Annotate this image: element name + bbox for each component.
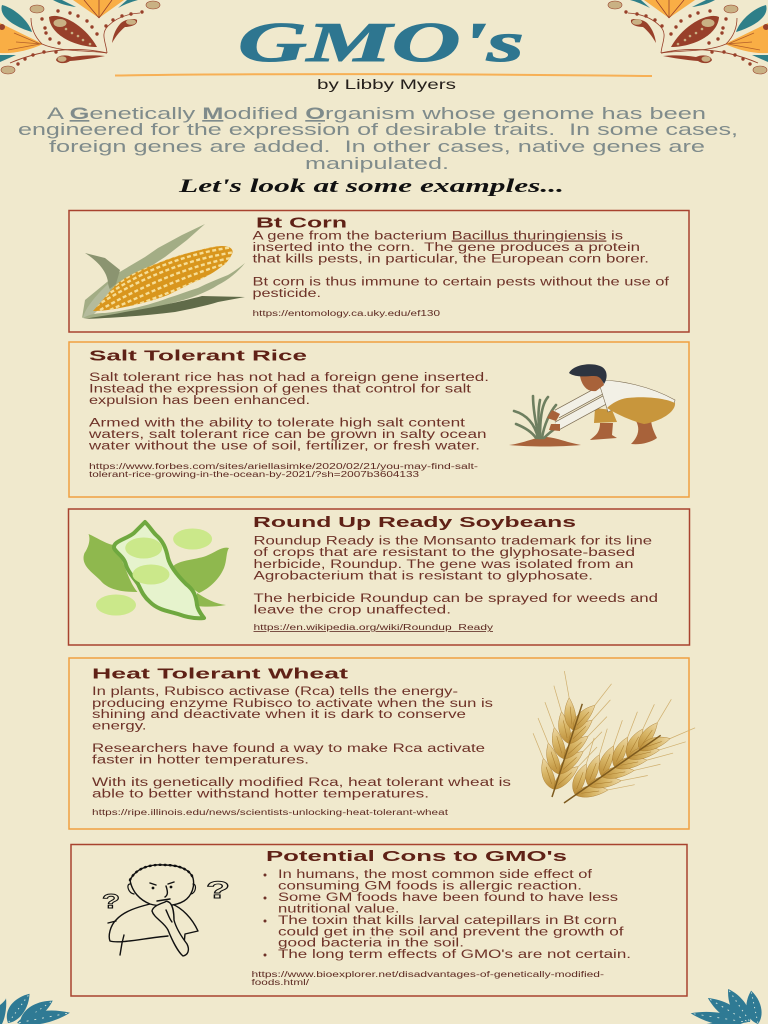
body text: In plants, Rubisco activase (Rca) tells the energy- <box>92 686 458 698</box>
bullet list: good bacteria in the soil. <box>278 938 464 950</box>
panel: Salt Tolerant Rice <box>69 342 689 497</box>
source link: tolerant-rice-growing-in-the-ocean-by-2021/?sh=2007b3604133 <box>89 470 420 479</box>
source link: https://ripe.illinois.edu/news/scientists-unlocking-heat-tolerant-wheat <box>92 808 449 817</box>
heading: Salt Tolerant Rice <box>89 348 307 364</box>
body text <box>252 230 670 300</box>
ornament: bottom right leaves <box>690 985 764 1024</box>
body text: Instead the expression of genes that control for salt <box>89 384 472 396</box>
source link <box>89 462 479 479</box>
body text: waters, salt tolerant rice can be grown in salty ocean <box>88 429 487 441</box>
source link: https://www.bioexplorer.net/disadvantages-of-genetically-modified- <box>252 970 604 979</box>
body text: water without the use of soil, fertilizer, or fresh water. <box>88 440 480 452</box>
body text: Agrobacterium that is resistant to glyphosate. <box>254 570 593 582</box>
body text: inserted into the corn. The gene produces a protein <box>252 242 640 254</box>
body text: A gene from the bacterium Bacillus thuringiensis is <box>252 230 623 242</box>
body text <box>254 536 658 616</box>
ornament: top right corner <box>608 0 768 74</box>
body text: of crops that are resistant to the glyphosate-based <box>254 547 635 559</box>
body text: pesticide. <box>252 288 321 300</box>
title underline <box>115 74 652 76</box>
panel: Round Up Ready Soybeans <box>68 509 690 645</box>
source link: foods.html/ <box>252 978 310 987</box>
icon: corn cob <box>82 224 245 319</box>
heading: Round Up Ready Soybeans <box>253 515 576 531</box>
bullet list: Some GM foods have been found to have less <box>278 892 618 904</box>
body text: herbicide, Roundup. The gene was isolated from an <box>254 559 634 571</box>
source link: https://www.forbes.com/sites/ariellasimke/2020/02/21/you-may-find-salt- <box>89 462 479 471</box>
body text: energy. <box>92 720 146 732</box>
body text: able to better withstand hotter temperatures. <box>92 788 429 800</box>
body text: With its genetically modified Rca, heat tolerant wheat is <box>92 777 511 789</box>
body text: Salt tolerant rice has not had a foreign gene inserted. <box>89 372 489 384</box>
heading: Bt Corn <box>256 216 347 232</box>
icon: thinking person <box>108 865 198 956</box>
source link: https://en.wikipedia.org/wiki/Roundup_Ready <box>254 623 493 632</box>
body text: Researchers have found a way to make Rca activate <box>92 743 485 755</box>
intro paragraph: manipulated. <box>305 155 449 173</box>
subheading: Let's look at some examples... <box>177 177 564 197</box>
body text: shining and deactivate when it is dark to conserve <box>92 709 466 721</box>
panel: Heat Tolerant Wheat <box>69 658 706 829</box>
bullet list: In humans, the most common side effect of <box>278 869 593 881</box>
body text: Roundup Ready is the Monsanto trademark for its line <box>254 536 652 548</box>
byline: by Libby Myers <box>317 77 456 92</box>
bullet list: The long term effects of GMO's are not certain. <box>278 949 631 961</box>
bullet list: The toxin that kills larval catepillars in Bt corn <box>278 915 617 927</box>
icon: wheat stalks <box>513 663 706 829</box>
intro paragraph <box>18 105 738 173</box>
body text: Armed with the ability to tolerate high salt content <box>89 418 466 430</box>
body text: leave the crop unaffected. <box>254 604 451 616</box>
body text: expulsion has been enhanced. <box>89 395 310 407</box>
ornament: top left corner <box>0 0 160 74</box>
intro paragraph: A G enetically M odified O rganism whose genome has been <box>47 105 706 123</box>
icon: left question mark: ? <box>102 891 120 913</box>
bullet list: could get in the soil and prevent the growth of <box>278 926 625 938</box>
intro paragraph: foreign genes are added. In other cases, native genes are <box>49 138 705 156</box>
icon: soybean pod <box>84 522 229 618</box>
intro paragraph: engineered for the expression of desirable traits. In some cases, <box>18 121 738 139</box>
bullet list: consuming GM foods is allergic reaction. <box>278 880 582 892</box>
ornament: bottom left leaves <box>0 989 71 1024</box>
title: GMO's <box>238 12 524 74</box>
panel: Potential Cons to GMO's <box>71 844 687 996</box>
body text <box>92 686 511 800</box>
body text <box>88 372 489 452</box>
source link <box>252 970 604 987</box>
icon: right question mark: ? <box>206 877 230 904</box>
icon: farmer tending rice <box>509 364 675 446</box>
heading: Heat Tolerant Wheat <box>92 666 348 682</box>
body text: that kills pests, in particular, the European corn borer. <box>252 254 649 266</box>
body text: faster in hotter temperatures. <box>92 754 309 766</box>
body text: producing enzyme Rubisco to activate when the sun is <box>92 698 493 710</box>
bullet list <box>264 869 631 961</box>
source link: https://entomology.ca.uky.edu/ef130 <box>252 309 441 318</box>
panel: Bt Corn <box>69 210 689 332</box>
body text: Bt corn is thus immune to certain pests without the use of <box>252 276 670 288</box>
bullet list: nutritional value. <box>278 904 400 916</box>
heading: Potential Cons to GMO's <box>266 849 567 865</box>
body text: The herbicide Roundup can be sprayed for weeds and <box>254 593 658 605</box>
